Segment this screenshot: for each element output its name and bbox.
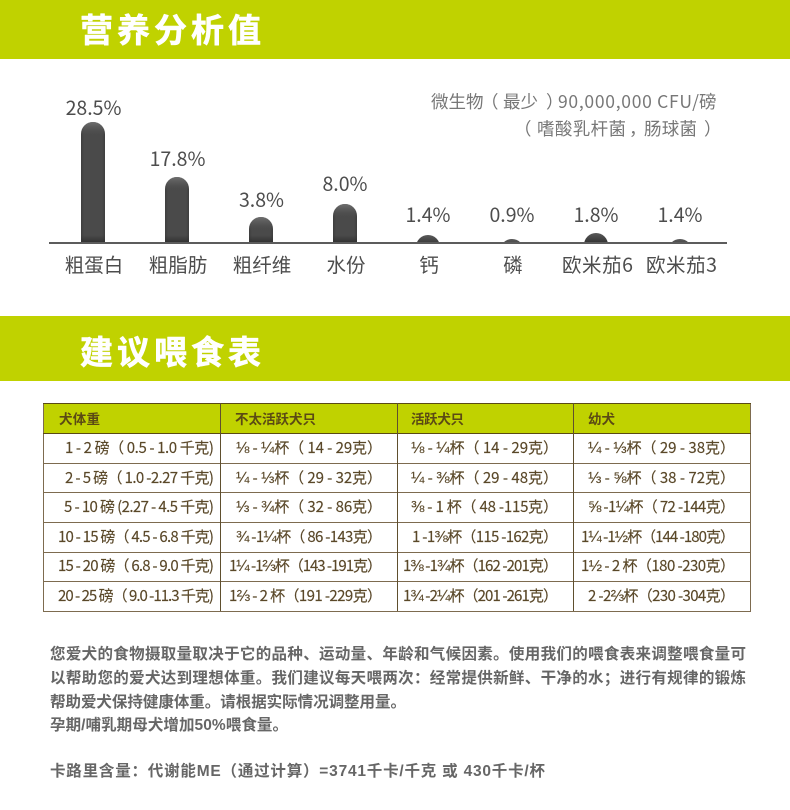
category labels: 水份 (326, 249, 366, 278)
table header row: 活跃犬只 (411, 411, 464, 427)
column: puppies: ⅓ - ⅝杯（ 38 - 72克） (588, 467, 735, 488)
microorganism note: （ (481, 89, 498, 114)
column: less active dogs: ¾ -1¼杯（ 86 -143克） (236, 526, 382, 547)
bar: omega 6 (584, 233, 608, 242)
value labels: 17.8% (150, 143, 205, 172)
category labels (65, 249, 717, 278)
microorganism note: （ (514, 116, 532, 141)
microorganism note (431, 89, 722, 141)
value labels: 1.8% (573, 199, 619, 228)
bar: calcium (417, 235, 439, 242)
bar: moisture (333, 204, 357, 242)
column: puppies: 2 -2⅔杯（230 -304克） (588, 585, 735, 606)
calorie content: 卡路里含量：代谢能ME（通过计算）=3741千卡/千克 或 430千卡/杯 (50, 761, 545, 780)
microorganism note: 磅 (699, 89, 716, 114)
table header row: 犬体重 (59, 411, 100, 427)
microorganism note: ， (629, 116, 646, 141)
column: active dogs: ⅜ - 1 杯（ 48 -115克） (411, 496, 558, 517)
value labels: 3.8% (239, 184, 284, 213)
column: dog weight: 2 - 5 磅（ 1.0 -2.27 千克) (65, 467, 214, 488)
column: active dogs: 1⅜ -1¾杯（162 -201克） (403, 555, 558, 576)
column: less active dogs: ¼ - ⅓杯（ 29 - 32克） (236, 467, 382, 488)
column: dog weight: 1 - 2 磅（ 0.5 - 1.0 千克) (65, 437, 214, 458)
column: puppies: ¼ - ⅓杯（ 29 - 38克） (588, 437, 735, 458)
value labels: 1.4% (657, 199, 703, 228)
feeding notes text: 帮助爱犬保持健康体重。请根据实际情况调整用量。 (50, 692, 406, 711)
microorganism note: 最少 (503, 89, 538, 114)
column: active dogs: ⅛ - ¼杯（ 14 - 29克） (411, 437, 558, 458)
column: puppies: 1¼ -1½杯（144 -180克） (581, 526, 735, 547)
column: dog weight: 10 - 15 磅（ 4.5 - 6.8 千克) (58, 526, 214, 547)
column: active dogs (403, 437, 558, 606)
title: feeding guide: 建议喂食表 (80, 334, 261, 371)
category labels: 粗纤维 (233, 249, 291, 278)
bar: phosphorus (504, 239, 520, 242)
microorganism note: 微生物 (431, 89, 484, 114)
value labels (66, 92, 703, 228)
column: less active dogs: ⅓ - ¾杯（ 32 - 86克） (236, 496, 382, 517)
table header row: 不太活跃犬只 (235, 411, 316, 427)
microorganism note: 肠球菌 (644, 116, 697, 141)
category labels: 粗蛋白 (65, 249, 123, 278)
feeding notes text: 您爱犬的食物摄取量取决于它的品种、运动量、年龄和气候因素。使用我们的喂食表来调整喂食量可 (50, 644, 746, 663)
column: active dogs: 1 -1⅜杯（115 -162克） (412, 526, 558, 547)
table header row: 幼犬 (588, 411, 616, 427)
category labels: 粗脂肪 (149, 249, 207, 278)
column: active dogs: ¼ - ⅜杯（ 29 - 48克） (411, 467, 558, 488)
feeding notes text: 孕期/哺乳期母犬增加50%喂食量。 (50, 715, 288, 734)
column: puppies: 1½ - 2 杯（180 -230克） (581, 555, 735, 576)
bar: crude fibre (249, 217, 273, 242)
feeding notes text (50, 644, 746, 734)
column: puppies: ⅝ -1¼杯（ 72 -144克） (588, 496, 735, 517)
value labels: 8.0% (322, 168, 368, 197)
value labels: 28.5% (66, 92, 121, 121)
microorganism note: ） (546, 89, 564, 114)
microorganism note: 嗜酸乳杆菌 (537, 116, 626, 141)
bar: crude protein (81, 122, 105, 242)
bar chart: nutrient percentages (49, 92, 727, 278)
feeding table (43, 403, 751, 612)
microorganism note: 90,000,000 CFU/ (558, 89, 699, 114)
column: puppies (581, 437, 735, 606)
column: dog weight: 15 - 20 磅（ 6.8 - 9.0 千克) (58, 555, 214, 576)
column: less active dogs (229, 437, 382, 606)
feeding notes text: 以帮助您的爱犬达到理想体重。我们建议每天喂两次：经常提供新鲜、干净的水；进行有规律的锻炼 (50, 668, 746, 687)
table header row (44, 404, 750, 434)
category labels: 钙 (419, 249, 439, 278)
column: dog weight: 5 - 10 磅 (2.27 - 4.5 千克) (64, 496, 214, 517)
column: less active dogs: 1¼ -1⅔杯（143 -191克） (229, 555, 382, 576)
column: dog weight (58, 437, 214, 606)
column: less active dogs: 1⅔ - 2 杯（191 -229克） (229, 585, 382, 606)
header band: nutrition analysis (0, 0, 790, 59)
bar: crude fat (165, 177, 189, 242)
column: less active dogs: ⅛ - ¼杯（ 14 - 29克） (236, 437, 382, 458)
value labels: 0.9% (489, 199, 535, 228)
bar: omega 3 (672, 239, 688, 242)
column: active dogs: 1¾ -2¼杯（201 -261克） (403, 585, 558, 606)
column: dog weight: 20 - 25 磅（ 9.0 -11.3 千克) (58, 585, 214, 606)
value labels: 1.4% (405, 199, 451, 228)
category labels: 欧米茄6 (562, 249, 633, 278)
header band: feeding guide (0, 316, 790, 381)
category labels: 磷 (503, 249, 523, 278)
title: nutrition analysis: 营养分析值 (80, 12, 261, 49)
microorganism note: ） (704, 116, 722, 141)
category labels: 欧米茄3 (646, 249, 717, 278)
